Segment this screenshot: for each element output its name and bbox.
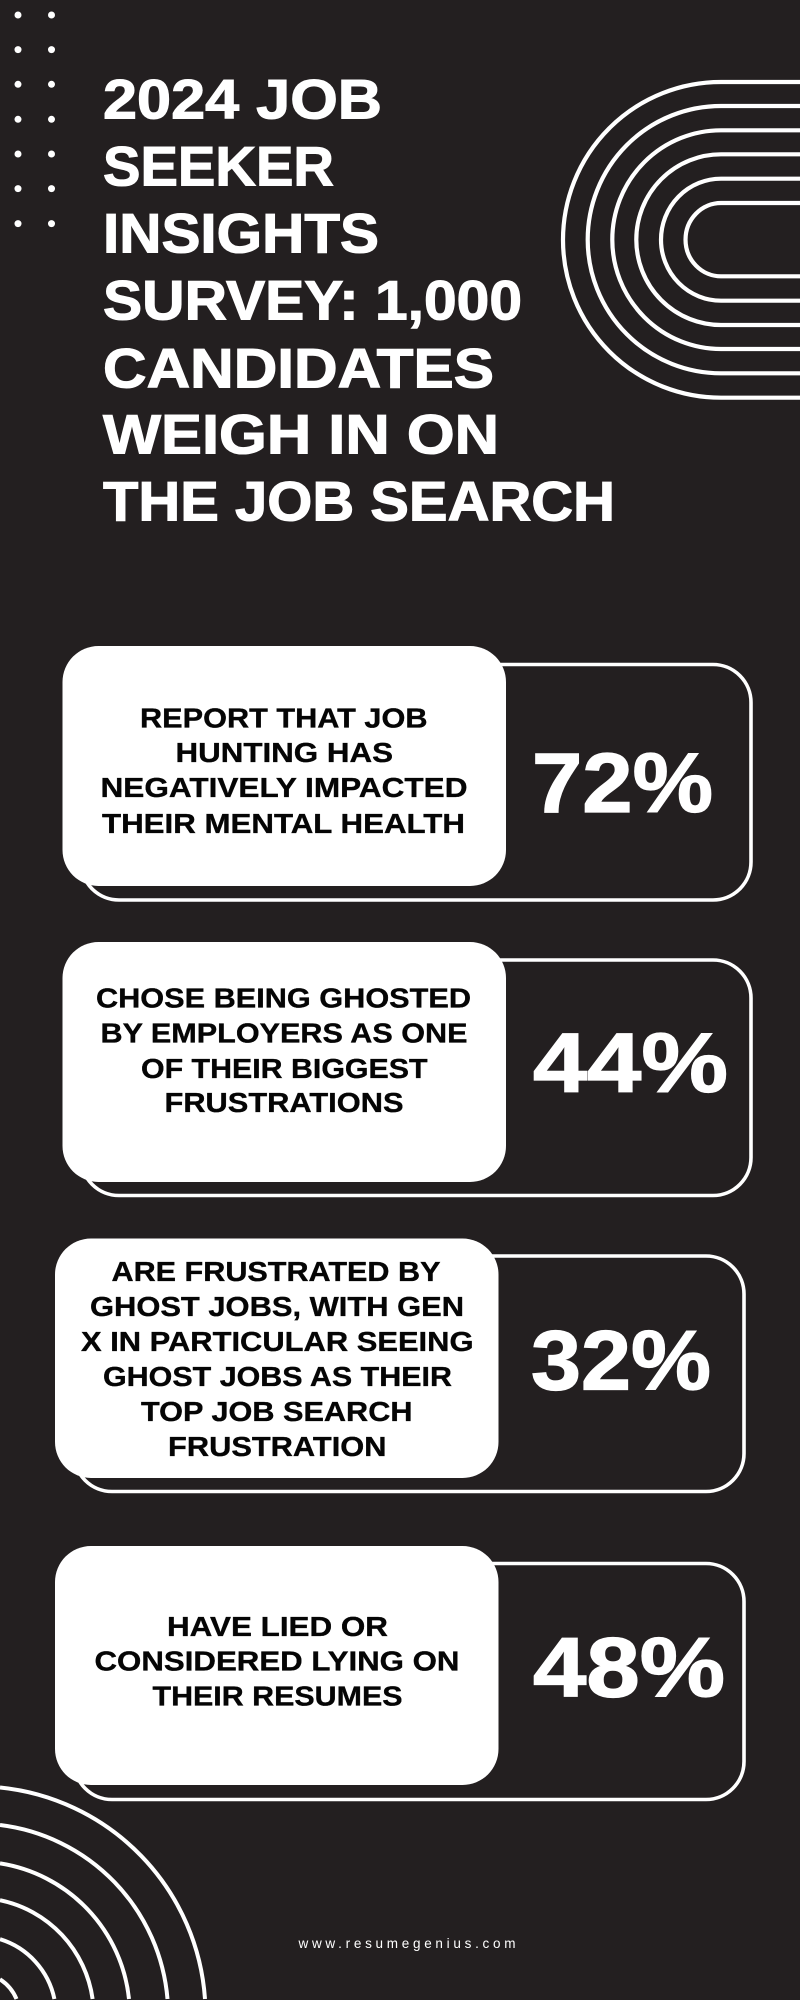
card text: CONSIDERED LYING ON	[94, 1646, 460, 1677]
panel: 32% ghost jobs	[55, 1238, 744, 1492]
title: 2024 JOB	[103, 68, 382, 131]
panel: 72% mental health	[62, 646, 751, 900]
title: INSIGHTS	[103, 202, 379, 264]
card text: X IN PARTICULAR SEEING	[81, 1326, 474, 1357]
statistic: 48%	[533, 1620, 725, 1714]
card text: GHOST JOBS AS THEIR	[103, 1361, 452, 1392]
card outline	[81, 664, 751, 900]
card text: CHOSE BEING GHOSTED	[96, 983, 471, 1014]
title: SEEKER	[103, 135, 334, 198]
card text	[94, 1611, 460, 1712]
decorative dot grid	[14, 12, 55, 227]
card text: TOP JOB SEARCH	[141, 1396, 412, 1427]
card text: REPORT THAT JOB	[140, 703, 428, 734]
title	[103, 68, 615, 533]
card text: FRUSTRATION	[168, 1431, 386, 1462]
statistic: 32%	[531, 1314, 711, 1408]
card text: OF THEIR BIGGEST	[141, 1053, 428, 1084]
footer website: www.resumegenius.com	[298, 1936, 516, 1951]
white label card	[55, 1238, 498, 1478]
card outline	[74, 1256, 744, 1492]
card outline	[81, 960, 751, 1196]
card text: HUNTING HAS	[176, 737, 393, 768]
statistic: 72%	[532, 736, 713, 830]
title: WEIGH IN ON	[103, 403, 499, 466]
card outline	[74, 1564, 744, 1800]
card text: THEIR RESUMES	[152, 1681, 402, 1712]
panel: 44% ghosted	[62, 942, 751, 1196]
bottom-left concentric arcs	[0, 1788, 205, 1999]
top-right concentric track arcs	[563, 82, 800, 398]
card text: HAVE LIED OR	[167, 1611, 388, 1642]
statistic: 44%	[533, 1016, 728, 1110]
title: SURVEY: 1,000	[103, 269, 522, 332]
card text: BY EMPLOYERS AS ONE	[100, 1018, 468, 1048]
card text: FRUSTRATIONS	[164, 1087, 404, 1118]
card text: ARE FRUSTRATED BY	[112, 1256, 440, 1287]
white label card	[62, 942, 506, 1182]
title: CANDIDATES	[103, 336, 494, 400]
white label card	[62, 646, 506, 886]
card text: NEGATIVELY IMPACTED	[100, 772, 468, 803]
panel: 48% resumes	[55, 1546, 744, 1800]
card text	[100, 703, 468, 839]
card text: GHOST JOBS, WITH GEN	[90, 1291, 464, 1322]
title: THE JOB SEARCH	[103, 470, 615, 533]
card text	[96, 983, 471, 1118]
card text: THEIR MENTAL HEALTH	[102, 808, 465, 839]
card text	[81, 1256, 474, 1462]
white label card	[55, 1546, 498, 1785]
